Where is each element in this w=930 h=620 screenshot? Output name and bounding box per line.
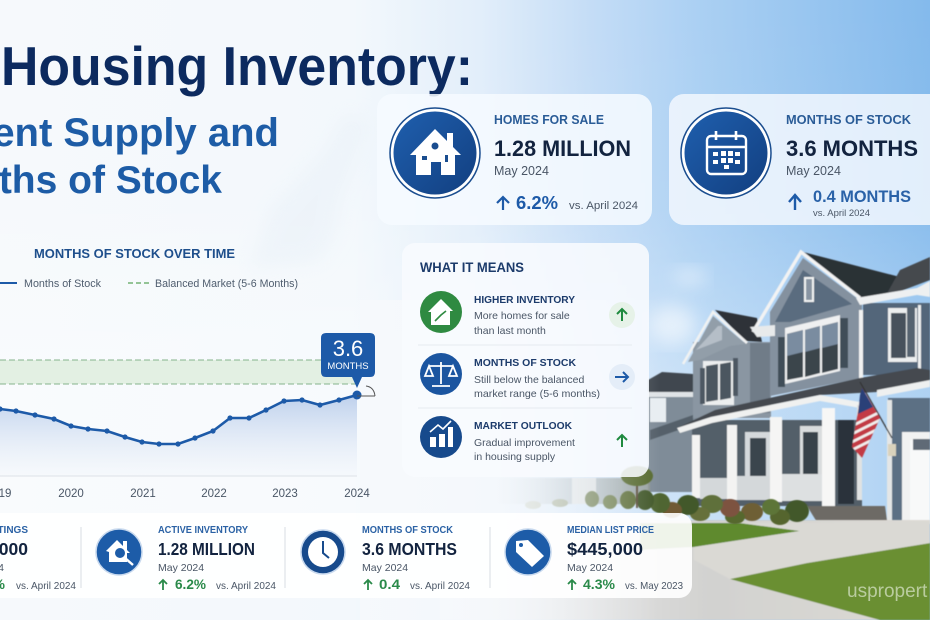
- item: market outlook: [420, 416, 627, 463]
- axis labels: 2021: [130, 488, 156, 500]
- chart heading: MONTHS OF STOCK OVER TIME: [34, 246, 235, 261]
- callout: 3.6 months: [321, 333, 375, 388]
- stat: months of stock: MONTHS OF STOCK: [362, 525, 454, 536]
- item: months of stock: Still below the balanced: [474, 374, 584, 386]
- item: higher inventory: HIGHER INVENTORY: [474, 294, 575, 306]
- item: months of stock: market range (5-6 months): [474, 388, 600, 400]
- stat: median list price: $445,000: [567, 539, 643, 559]
- stat: months of stock: [301, 525, 470, 592]
- stat: active inventory: ACTIVE INVENTORY: [158, 525, 248, 536]
- axis labels: 2024: [344, 488, 370, 500]
- icon: up arrow: [789, 195, 801, 210]
- item: higher inventory: than last month: [474, 325, 546, 337]
- stat: active inventory: vs. April 2024: [216, 580, 276, 592]
- area under line: [0, 395, 357, 476]
- value: 1.28 MILLION: [494, 136, 631, 161]
- stat: months of stock: vs. April 2024: [410, 580, 470, 592]
- stat: median list price: May 2024: [567, 562, 613, 574]
- axis labels: 2023: [272, 488, 298, 500]
- left fade over photo: [360, 300, 660, 620]
- garage: [877, 380, 930, 524]
- stat: new listings (cropped): [0, 525, 76, 592]
- stat: active inventory: 1.28 MILLION: [158, 539, 255, 559]
- ground: driveway and lawns: [440, 520, 930, 620]
- panel: bottom statistics strip: [0, 513, 692, 598]
- stat: median list price: [505, 525, 683, 592]
- date: May 2024: [786, 164, 841, 178]
- item: months of stock: [420, 353, 635, 400]
- stock line: [0, 395, 357, 444]
- stat: active inventory: May 2024: [158, 562, 204, 574]
- comparison: vs. April 2024: [813, 208, 870, 219]
- item: market outlook: Gradual improvement: [474, 437, 575, 449]
- icon: house: [390, 108, 480, 198]
- porch: [677, 368, 930, 507]
- panel: homes for sale: [377, 94, 652, 225]
- faint US map silhouette: [250, 112, 370, 268]
- icon: calendar: [681, 108, 771, 198]
- stat: months of stock: May 2024: [362, 562, 408, 574]
- subtitle: ths of Stock: [0, 159, 222, 202]
- comparison: vs. April 2024: [569, 200, 638, 212]
- neighbouring house: [490, 372, 698, 504]
- heading: WHAT IT MEANS: [420, 260, 524, 275]
- value: 3.6 MONTHS: [786, 136, 918, 161]
- front steps: [807, 506, 888, 527]
- stat: median list price: MEDIAN LIST PRICE: [567, 525, 654, 536]
- shrubs: [525, 490, 809, 525]
- watermark: uspropert: [847, 581, 928, 602]
- label: MONTHS OF STOCK: [786, 113, 911, 127]
- panel: what it means: [402, 243, 649, 477]
- clouds: [648, 270, 708, 345]
- item: market outlook: MARKET OUTLOOK: [474, 420, 572, 432]
- axis labels: 2020: [58, 488, 84, 500]
- item: months of stock: MONTHS OF STOCK: [474, 357, 576, 369]
- axis labels: 2022: [201, 488, 227, 500]
- panel: months of stock: [669, 94, 930, 225]
- small tree: [621, 466, 653, 508]
- stat: new listings (cropped): vs. April 2024: [16, 580, 76, 592]
- callout: 3.6 months: 3.6: [333, 336, 363, 361]
- label: HOMES FOR SALE: [494, 113, 604, 127]
- stat: median list price: vs. May 2023: [625, 580, 683, 592]
- chart legend: Months of Stock: [24, 278, 101, 290]
- line chart: months of stock over time: [0, 333, 375, 500]
- stat: active inventory: 6.2%: [175, 576, 207, 592]
- item: higher inventory: [420, 291, 635, 337]
- photo: suburban house: [538, 249, 930, 524]
- chart legend: [0, 278, 298, 290]
- stat: median list price: 4.3%: [583, 576, 616, 592]
- left gable wing: [683, 310, 771, 418]
- axis labels: [0, 488, 370, 500]
- date: May 2024: [494, 164, 549, 178]
- chart legend: Balanced Market (5-6 Months): [155, 278, 298, 290]
- title: Housing Inventory:: [1, 35, 473, 97]
- stat: months of stock: 3.6 MONTHS: [362, 539, 457, 559]
- main upper storey: [750, 252, 930, 396]
- change: 6.2%: [516, 193, 558, 213]
- callout: 3.6 months: MONTHS: [327, 361, 369, 372]
- subtitle: [0, 111, 279, 202]
- icon: up arrow: [497, 197, 509, 210]
- stat: active inventory: [96, 525, 276, 592]
- flag: [850, 382, 892, 458]
- item: market outlook: in housing supply: [474, 451, 556, 463]
- stat: months of stock: 0.4: [379, 576, 400, 592]
- subtitle: ent Supply and: [0, 111, 279, 155]
- item: higher inventory: More homes for sale: [474, 310, 570, 322]
- change: 0.4 MONTHS: [813, 187, 911, 206]
- balanced market band: [0, 360, 357, 384]
